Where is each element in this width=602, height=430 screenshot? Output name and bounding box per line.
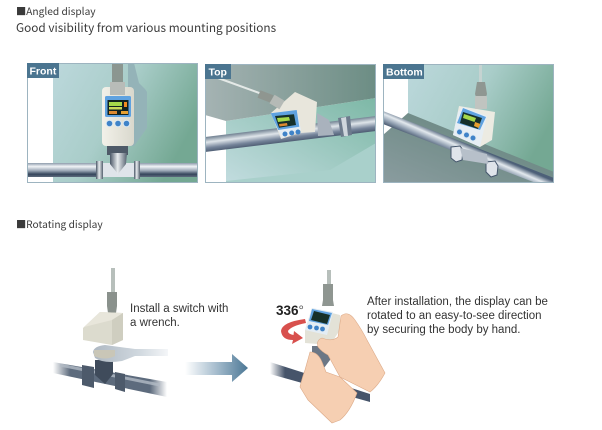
pipe	[205, 116, 376, 152]
wrench	[93, 345, 168, 362]
tab: Front: Front	[30, 66, 57, 78]
tab: Top	[205, 64, 231, 79]
cable	[327, 270, 331, 284]
label: 336 degrees: 336°	[276, 303, 304, 318]
device	[102, 63, 134, 174]
heading: Rotating display: ■Rotating display	[16, 216, 103, 231]
arrow	[185, 354, 248, 382]
pipe	[270, 362, 370, 402]
body	[83, 312, 123, 345]
text: install: Install a switch with	[130, 303, 228, 315]
connector	[107, 292, 117, 313]
illustration: install with wrench	[53, 268, 168, 397]
rotation arrow	[281, 319, 306, 344]
pipe	[27, 161, 198, 179]
panel: Bottom view	[383, 64, 554, 190]
text: rotated description	[367, 296, 548, 336]
pipe	[53, 362, 167, 397]
text: rotated description: rotated to an easy-to-see direction	[367, 310, 542, 322]
cable	[218, 79, 260, 94]
frame: Top	[206, 64, 376, 182]
pipe	[384, 112, 553, 182]
text: install line 2: a wrench.	[130, 317, 180, 329]
connector	[322, 284, 334, 306]
tab: Top: Top	[208, 66, 227, 78]
frame: Bottom	[384, 64, 554, 182]
heading: Angled display: ■Angled display	[16, 3, 96, 18]
illustration: rotating by hand	[270, 270, 385, 423]
panel: Top view	[205, 64, 376, 183]
device	[305, 308, 340, 345]
text: rotated description: After installation, the display can be	[367, 296, 548, 308]
tab: Front	[27, 63, 59, 78]
panel: Front view	[27, 63, 198, 183]
hand: upper	[318, 314, 385, 392]
tab: Bottom: Bottom	[386, 66, 423, 78]
device	[453, 64, 495, 147]
frame: Front	[28, 64, 198, 182]
device	[259, 92, 317, 139]
text: rotated description: by securing the body by hand.	[367, 324, 520, 336]
cable	[111, 268, 115, 292]
subheading: visibility: Good visibility from various mounting positions	[16, 19, 277, 36]
hand: lower	[300, 352, 357, 423]
